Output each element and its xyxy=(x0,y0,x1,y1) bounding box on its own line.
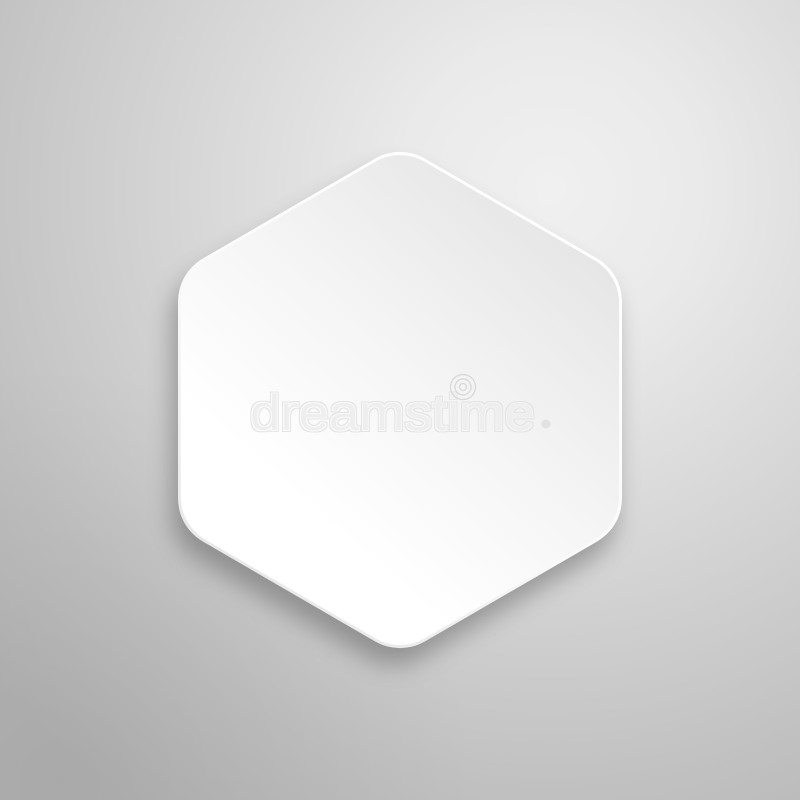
icon: spiral xyxy=(450,374,476,400)
hexagon rim xyxy=(178,152,622,648)
watermark xyxy=(250,374,550,441)
hexagon drop shadow xyxy=(172,169,616,665)
watermark text: dreamstime xyxy=(250,385,535,441)
hexagon panel xyxy=(178,152,622,648)
hexagon face xyxy=(181,155,619,645)
icon: registered dot xyxy=(542,420,550,428)
